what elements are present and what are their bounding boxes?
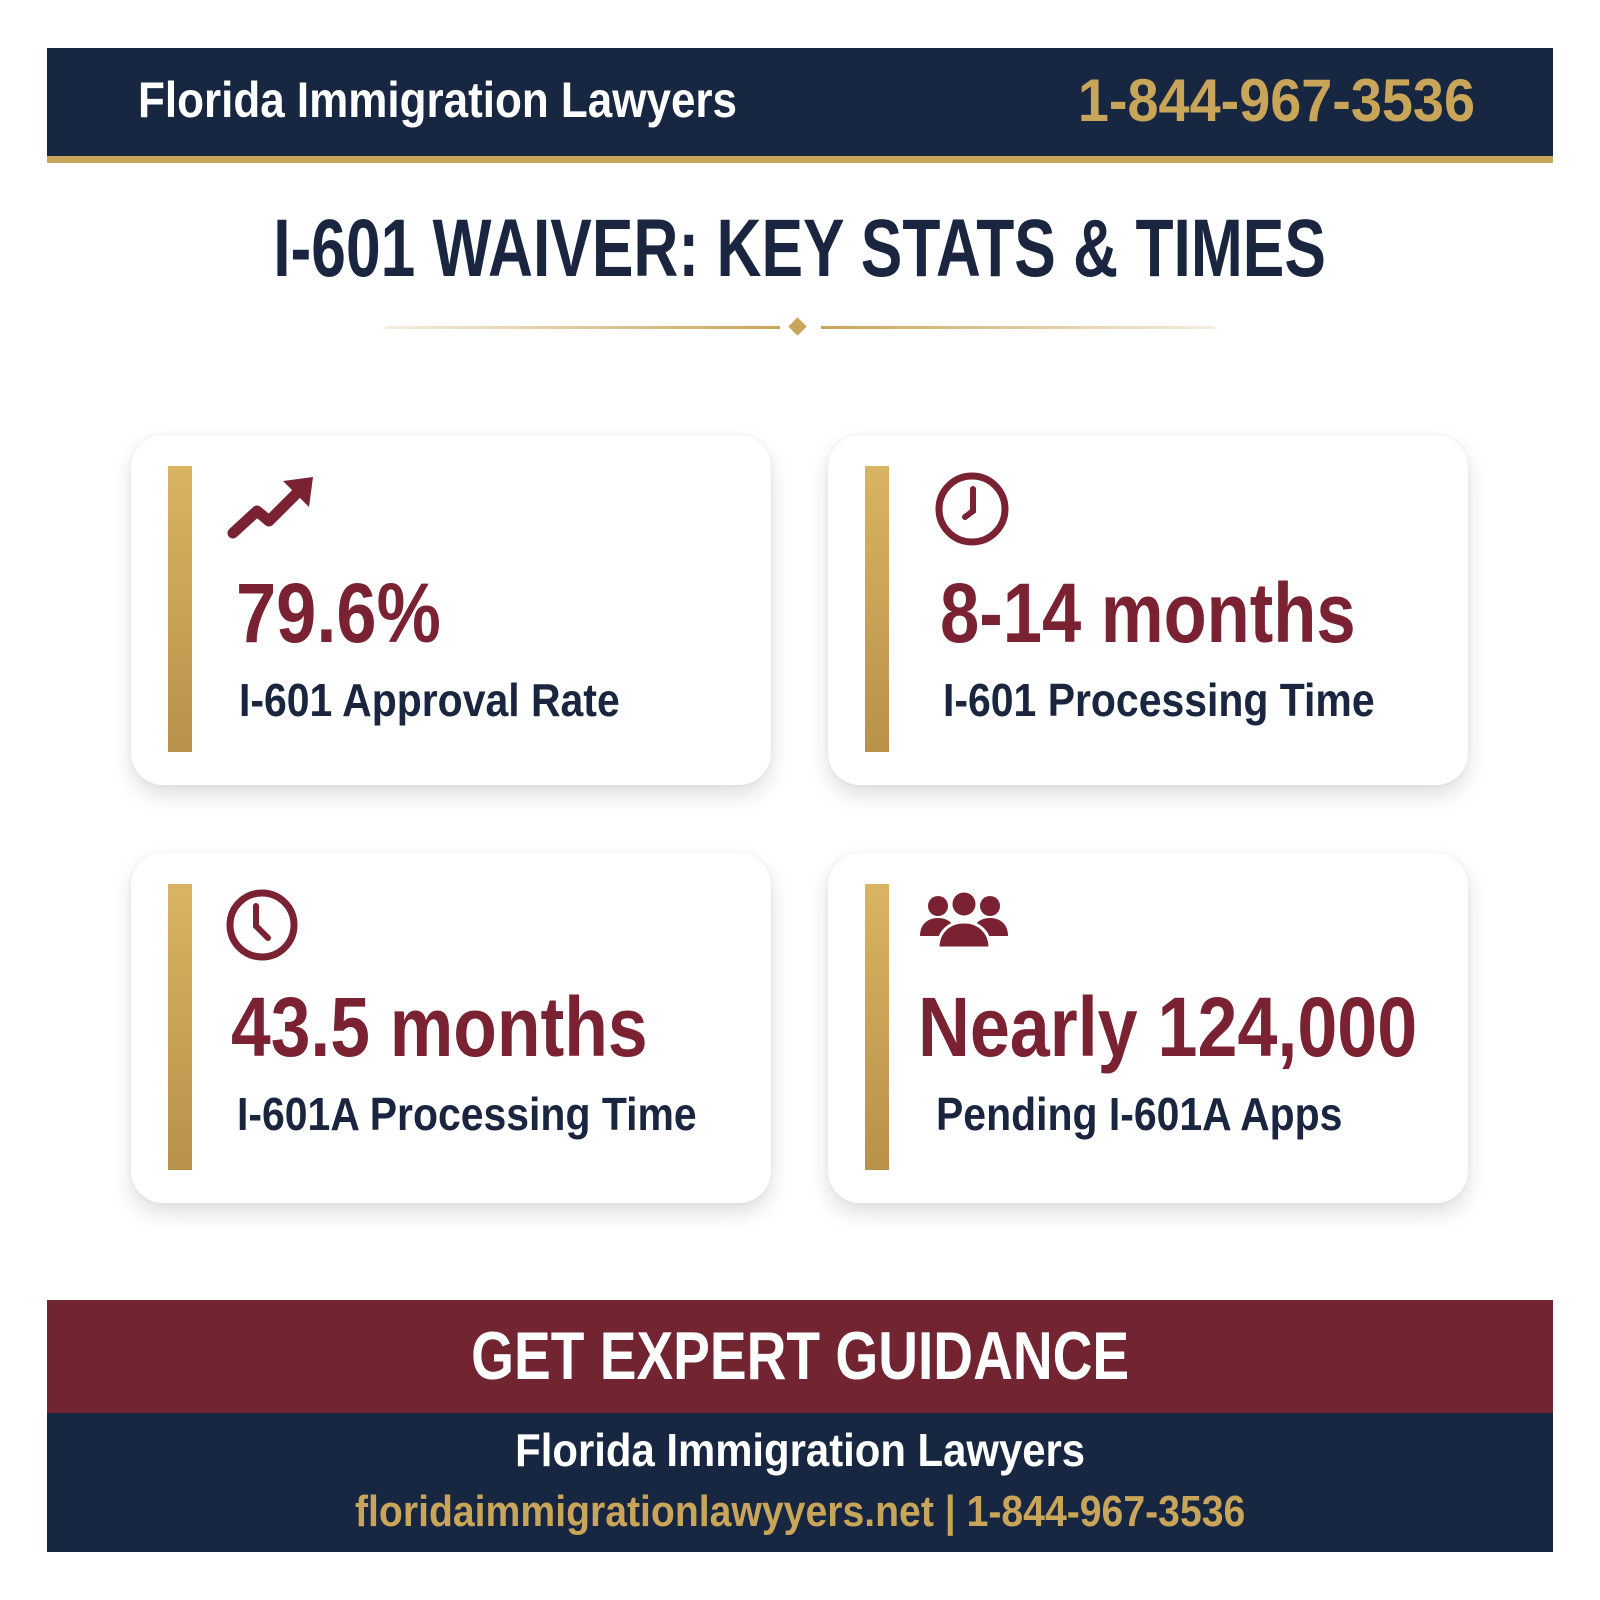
header bar: [47, 48, 1553, 163]
stat label: I-601 Approval Rate: [239, 674, 620, 726]
header firm name: Florida Immigration Lawyers: [138, 72, 737, 128]
title divider: [385, 317, 1215, 336]
card: pending apps: [828, 853, 1468, 1203]
card: I-601A processing: [131, 853, 771, 1203]
title: I-601 WAIVER: KEY STATS & TIMES: [274, 203, 1326, 294]
CTA red band: [47, 1300, 1553, 1413]
footer firm name: Florida Immigration Lawyers: [515, 1424, 1085, 1476]
stat label: I-601A Processing Time: [237, 1088, 697, 1140]
stat number: 43.5 months: [231, 980, 648, 1074]
stat number: Nearly 124,000: [918, 980, 1417, 1074]
footer contact: floridaimmigrationlawyyers.net | 1-844-967-3536: [355, 1487, 1245, 1536]
stat label: Pending I-601A Apps: [936, 1088, 1342, 1140]
card: I-601 processing: [828, 435, 1468, 785]
stat number: 79.6%: [236, 566, 441, 660]
stat label: I-601 Processing Time: [943, 674, 1375, 726]
card: approval rate: [131, 435, 771, 785]
header phone: 1-844-967-3536: [1078, 67, 1475, 134]
icon: trending arrow: [228, 477, 313, 538]
footer navy band: [47, 1413, 1553, 1552]
icon: clock: [226, 890, 298, 960]
icon: people: [920, 892, 1008, 946]
icon: clock: [936, 472, 1008, 546]
CTA heading: GET EXPERT GUIDANCE: [471, 1318, 1129, 1394]
stat number: 8-14 months: [940, 566, 1356, 660]
